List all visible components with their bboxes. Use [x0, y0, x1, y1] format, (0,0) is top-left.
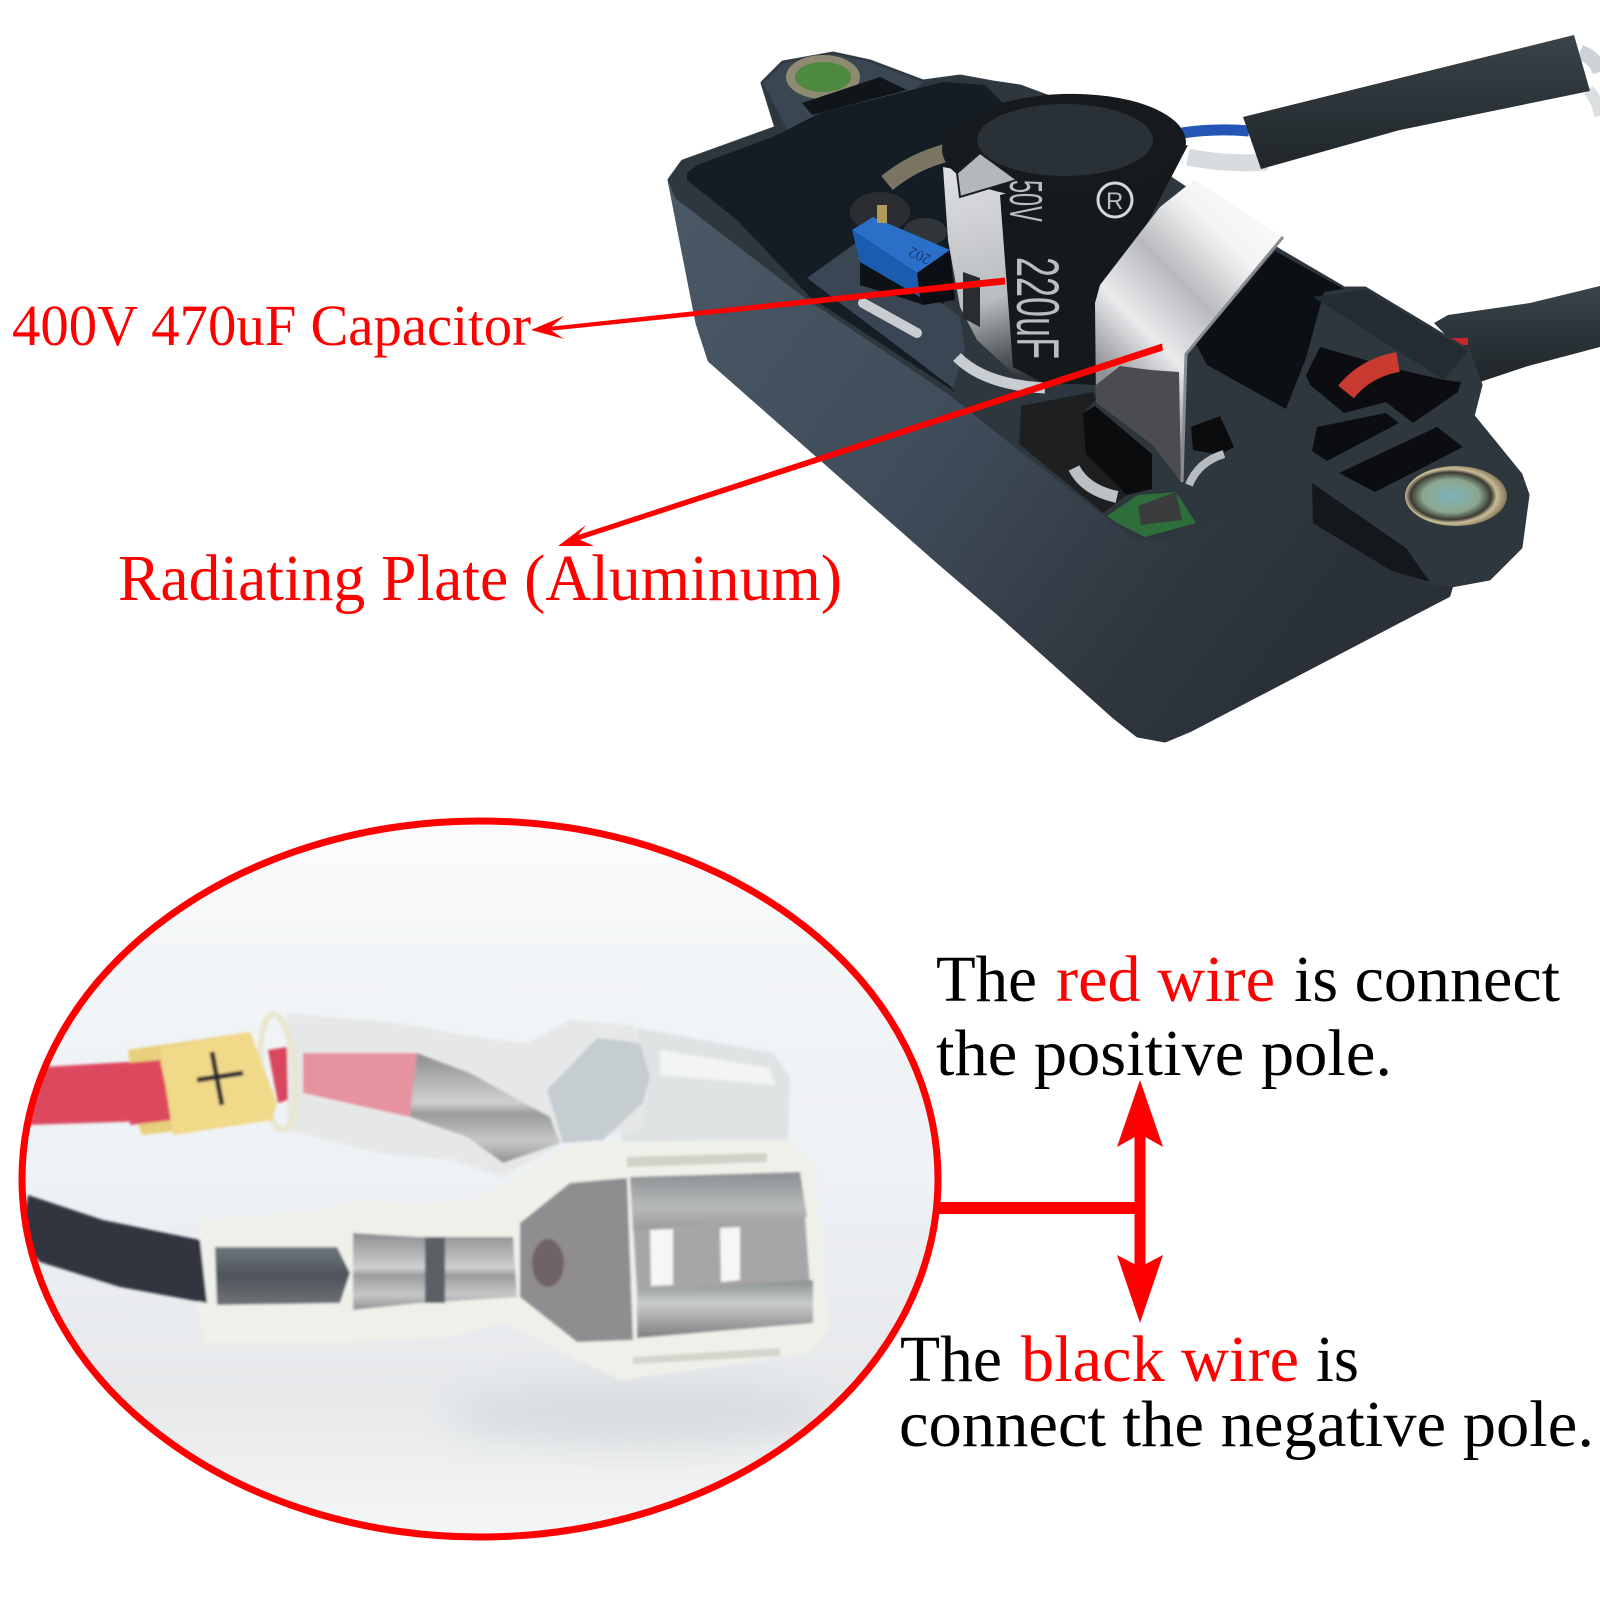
right mounting screw [1405, 466, 1507, 526]
plus marker sleeve [128, 1032, 277, 1135]
electrolytic capacitor [940, 90, 1188, 388]
left interior cavity [687, 82, 1003, 392]
trimmer marking: 202 [907, 243, 934, 267]
left mounting screw [786, 55, 907, 115]
label: capacitor: 400V 470uF Capacitor [12, 293, 531, 358]
rectifier diode and solder [1074, 406, 1234, 537]
text: black wire instruction: is [1316, 1323, 1359, 1396]
leader and double-headed arrow [935, 1080, 1163, 1323]
top output cable [1182, 35, 1600, 169]
text: red wire instruction: the positive pole. [936, 1017, 1392, 1090]
capacitor markings: 220uF [1004, 257, 1070, 359]
text: red wire instruction: is connect [1294, 943, 1560, 1016]
lower terminal: black wire [20, 1140, 830, 1380]
text: red wire instruction [936, 943, 1560, 1090]
text: black wire instruction: The [900, 1323, 1002, 1396]
text: red wire instruction: red wire [1056, 943, 1275, 1016]
text: red wire instruction: The [936, 943, 1037, 1016]
lower input cable [1434, 286, 1600, 382]
callout arrow: radiating plate [558, 344, 1163, 546]
electrolytic capacitor: R [1106, 188, 1123, 215]
callout arrow: capacitor [531, 278, 1005, 339]
housing top face [670, 54, 1527, 585]
interior floor near trimmer [807, 240, 965, 388]
trimmer potentiometer [850, 192, 955, 333]
product photo: voltage regulator [670, 35, 1600, 740]
circular detail photo: wire terminals [20, 821, 938, 1537]
left lug highlight [763, 54, 923, 135]
label: radiating plate: Radiating Plate (Aluminum) [118, 542, 842, 615]
cast shadow [470, 1388, 810, 1446]
terminal housing and red wire [1306, 289, 1468, 582]
upper terminal: red wire [26, 1013, 790, 1177]
red circle outline [22, 821, 938, 1537]
inner coil [887, 152, 950, 183]
text: black wire instruction: connect the negative pole. [899, 1388, 1594, 1461]
regulator housing [670, 54, 1527, 740]
electrolytic capacitor: 50V [1000, 180, 1052, 222]
text: black wire instruction: black wire [1021, 1323, 1299, 1396]
aluminium radiating plate [1095, 180, 1283, 482]
text: black wire instruction [899, 1323, 1594, 1461]
black chip area [1019, 392, 1127, 513]
dark cavity behind plate [1196, 251, 1344, 409]
